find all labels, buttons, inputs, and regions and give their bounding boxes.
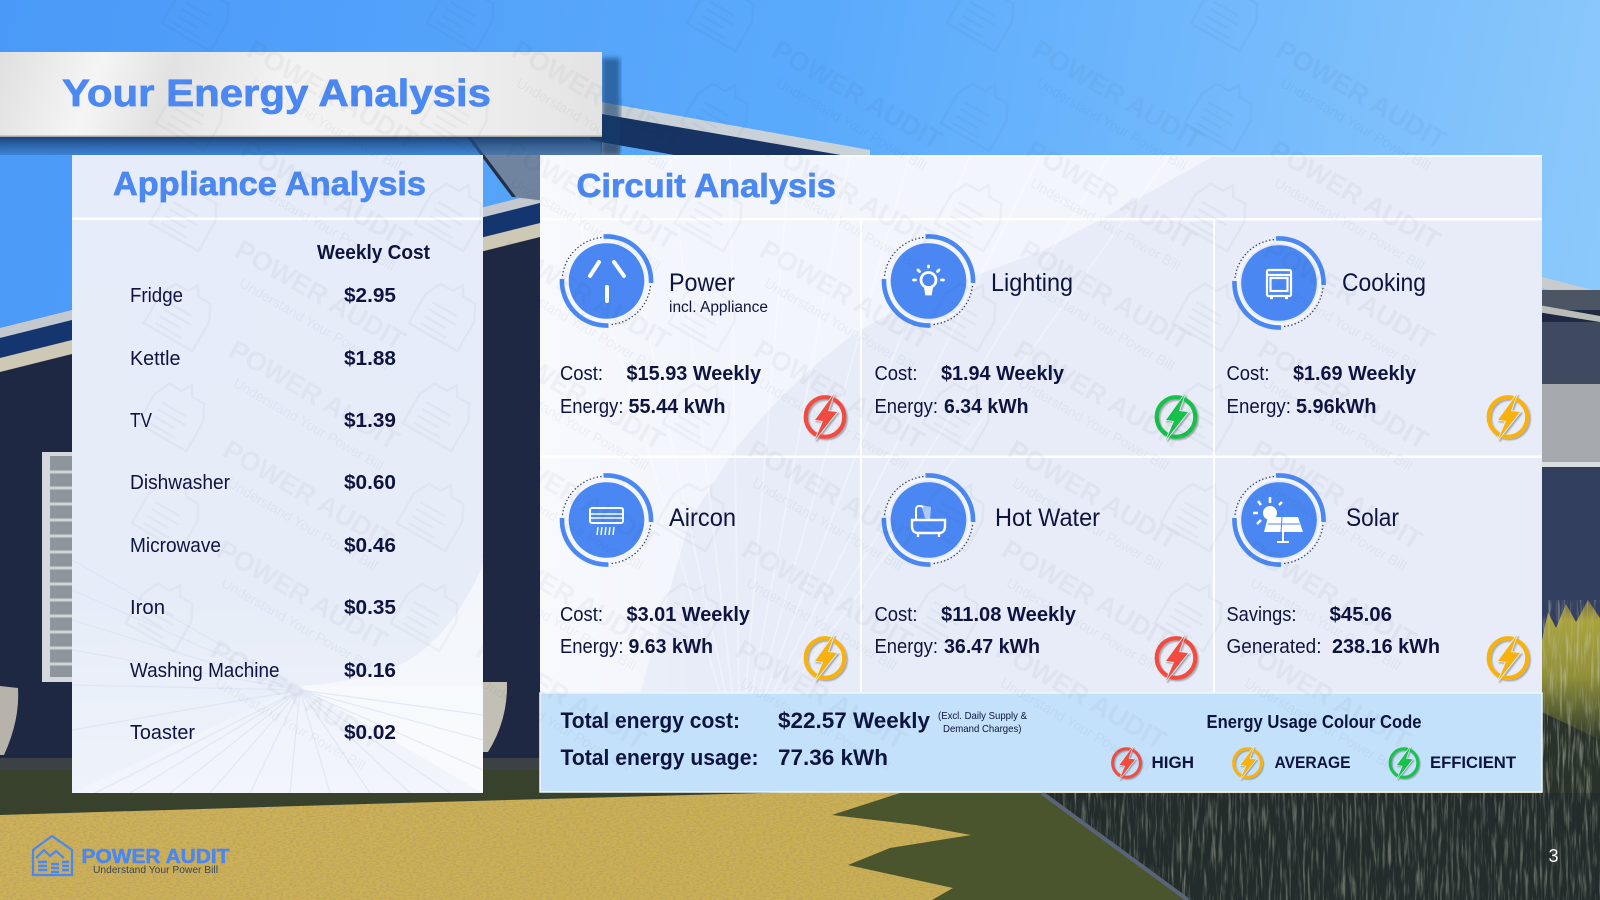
card: solar: Savings:: [1226, 604, 1296, 626]
watermark pattern: POWER AUDIT: [1241, 534, 1422, 656]
appliance list: $0.60: [344, 472, 396, 494]
legend: energy usage colour code: Energy Usage Colour Code: [1206, 712, 1422, 732]
watermark pattern: POWER AUDIT: [242, 34, 423, 156]
watermark pattern: [119, 0, 1463, 774]
watermark pattern: Understand Your Power Bill: [502, 275, 657, 374]
icon: sun and solar panel: [1234, 475, 1324, 565]
card: cooking: Cost:: [1226, 363, 1270, 385]
watermark pattern: Understand Your Power Bill: [756, 375, 911, 474]
card: cooking: Cooking: [1342, 269, 1426, 297]
watermark pattern: POWER AUDIT: [483, 434, 664, 556]
watermark pattern: POWER AUDIT: [1247, 434, 1428, 556]
card: hot water: Hot Water: [995, 504, 1100, 532]
watermark pattern: Understand Your Power Bill: [1010, 475, 1165, 574]
watermark pattern: POWER AUDIT: [224, 334, 405, 456]
watermark pattern: Understand Your Power Bill: [1278, 75, 1433, 174]
watermark pattern: Understand Your Power Bill: [762, 275, 917, 374]
appliance list: Iron: [130, 597, 165, 619]
icon: red high bolt: [1157, 635, 1195, 681]
watermark pattern: Understand Your Power Bill: [496, 375, 651, 474]
card: power: [560, 236, 844, 440]
watermark pattern: POWER AUDIT: [1253, 334, 1434, 456]
heading: Appliance Analysis: [113, 165, 426, 202]
card: solar: Solar: [1346, 504, 1399, 532]
watermark pattern: Understand Your Power Bill: [231, 375, 386, 474]
decorative fan and swoosh: [72, 560, 483, 793]
card: aircon: $3.01 Weekly: [626, 604, 751, 626]
card: power: Energy:: [560, 396, 624, 418]
icon: house with bars: [33, 836, 72, 875]
icon: bathtub with shower: [884, 475, 973, 565]
legend: energy usage colour code: EFFICIENT: [1430, 753, 1517, 772]
card: aircon: Cost:: [560, 604, 603, 626]
watermark pattern: POWER AUDIT: [1259, 234, 1440, 356]
icon: red high bolt: [806, 394, 844, 440]
watermark pattern: POWER AUDIT: [218, 434, 399, 556]
watermark pattern: Understand Your Power Bill: [219, 575, 374, 674]
right roof and wall: [1500, 266, 1600, 637]
appliance list: $1.39: [344, 410, 396, 432]
watermark pattern: POWER AUDIT: [761, 134, 942, 256]
card: hot water: $11.08 Weekly: [941, 604, 1077, 626]
card: lighting: Energy:: [874, 396, 938, 418]
card: cooking: $1.69 Weekly: [1293, 363, 1417, 385]
appliance list: Washing Machine: [130, 660, 280, 682]
watermark pattern: Understand Your Power Bill: [1034, 75, 1189, 174]
card: cooking: Energy:: [1226, 396, 1291, 418]
house wall: [0, 170, 1600, 800]
card: solar: [1226, 475, 1527, 681]
watermark pattern: POWER AUDIT: [1009, 334, 1190, 456]
watermark pattern: Understand Your Power Bill: [1242, 675, 1397, 774]
card: solar: $45.06: [1330, 604, 1392, 626]
legend: energy usage colour code: HIGH: [1152, 753, 1194, 772]
footer: totals and legend: [540, 693, 1542, 792]
watermark pattern: Understand Your Power Bill: [1254, 475, 1409, 574]
watermark pattern: Understand Your Power Bill: [1028, 175, 1183, 274]
logo: power audit: POWER AUDIT: [82, 846, 230, 868]
totals: Demand Charges): [943, 723, 1022, 735]
legend: energy usage colour code: [1113, 712, 1517, 780]
centre gable roof and soffit: [467, 100, 870, 210]
watermark pattern: POWER AUDIT: [749, 334, 930, 456]
icon: amber average bolt: [1489, 635, 1527, 681]
card: cooking: [1226, 238, 1527, 440]
icon: amber average bolt: [1489, 394, 1527, 440]
watermark pattern: Understand Your Power Bill: [1266, 275, 1421, 374]
appliance list: $0.46: [344, 535, 396, 557]
watermark pattern: POWER AUDIT: [471, 634, 652, 756]
appliance list: $1.88: [344, 348, 396, 370]
appliance list: Kettle: [130, 348, 180, 370]
card: aircon: 9.63 kWh: [628, 636, 713, 658]
watermark pattern: Understand Your Power Bill: [1272, 175, 1427, 274]
watermark pattern: POWER AUDIT: [1003, 434, 1184, 556]
totals: $22.57 Weekly: [778, 708, 931, 733]
decorative swoosh and rays: [540, 157, 1211, 692]
watermark pattern: POWER AUDIT: [1265, 134, 1446, 256]
watermark pattern: POWER AUDIT: [755, 234, 936, 356]
card: aircon: Aircon: [669, 504, 736, 532]
watermark pattern: POWER AUDIT: [230, 234, 411, 356]
watermark pattern: Understand Your Power Bill: [243, 175, 398, 274]
totals: 77.36 kWh: [778, 745, 888, 770]
watermark pattern: Understand Your Power Bill: [249, 75, 404, 174]
column header: Weekly Cost: [317, 242, 430, 264]
icon: green efficient bolt: [1157, 394, 1195, 440]
card: hot water: Cost:: [874, 604, 918, 626]
watermark pattern: POWER AUDIT: [489, 334, 670, 456]
watermark pattern: POWER AUDIT: [236, 134, 417, 256]
appliance list: [130, 285, 396, 744]
watermark pattern: POWER AUDIT: [212, 534, 393, 656]
watermark pattern: POWER AUDIT: [1021, 134, 1202, 256]
watermark pattern: Understand Your Power Bill: [478, 675, 633, 774]
watermark pattern: POWER AUDIT: [737, 534, 918, 656]
heading: Circuit Analysis: [576, 167, 836, 204]
totals: [560, 708, 1027, 770]
appliance list: $0.02: [344, 722, 396, 744]
card: solar: 238.16 kWh: [1332, 636, 1440, 658]
watermark pattern: POWER AUDIT: [767, 34, 948, 156]
logo: power audit: [33, 836, 230, 876]
watermark pattern: Understand Your Power Bill: [768, 175, 923, 274]
watermark pattern: Understand Your Power Bill: [738, 675, 893, 774]
appliance list: Fridge: [130, 285, 183, 307]
watermark pattern: Understand Your Power Bill: [490, 475, 645, 574]
panel: appliance analysis: [72, 155, 483, 793]
title band shadow: [0, 58, 620, 155]
panel: circuit analysis: [540, 155, 1542, 792]
watermark pattern: POWER AUDIT: [501, 134, 682, 256]
card: lighting: [874, 236, 1195, 440]
watermark pattern: Understand Your Power Bill: [213, 675, 368, 774]
watermark pattern: POWER AUDIT: [507, 34, 688, 156]
icon: oven: [1234, 238, 1324, 328]
watermark pattern: POWER AUDIT: [1235, 634, 1416, 756]
watermark pattern: Understand Your Power Bill: [225, 475, 380, 574]
watermark pattern: POWER AUDIT: [477, 534, 658, 656]
page number: 3: [1548, 846, 1559, 866]
totals: Total energy cost:: [560, 708, 740, 733]
card: power: 55.44 kWh: [628, 396, 726, 418]
card: power: Power: [669, 269, 735, 297]
watermark pattern: POWER AUDIT: [495, 234, 676, 356]
watermark pattern: Understand Your Power Bill: [774, 75, 929, 174]
watermark pattern: POWER AUDIT: [206, 634, 387, 756]
card: aircon: [560, 475, 844, 681]
appliance list: $0.16: [344, 660, 396, 682]
title: Your Energy Analysis: [62, 73, 491, 115]
logo: power audit: Understand Your Power Bill: [93, 864, 218, 876]
watermark pattern: Understand Your Power Bill: [237, 275, 392, 374]
totals: (Excl. Daily Supply &: [938, 710, 1027, 722]
card: solar: Generated:: [1226, 636, 1322, 658]
watermark pattern: POWER AUDIT: [1015, 234, 1196, 356]
planter pots: [0, 682, 507, 755]
icon: amber average bolt: [806, 635, 844, 681]
card: hot water: Energy:: [874, 636, 938, 658]
card: hot water: 36.47 kWh: [944, 636, 1040, 658]
card: lighting: $1.94 Weekly: [941, 363, 1065, 385]
watermark pattern: Understand Your Power Bill: [750, 475, 905, 574]
card: power: $15.93 Weekly: [626, 363, 762, 385]
icon: air conditioner: [562, 475, 651, 565]
card: power: incl. Appliance: [669, 299, 768, 316]
icon: light bulb: [884, 236, 973, 326]
watermark pattern: Understand Your Power Bill: [508, 175, 663, 274]
watermark pattern: Understand Your Power Bill: [484, 575, 639, 674]
icon: power socket: [562, 236, 651, 326]
window with louvres: [42, 452, 82, 682]
appliance list: Dishwasher: [130, 472, 230, 494]
card: lighting: 6.34 kWh: [944, 396, 1028, 418]
card: lighting: Cost:: [874, 363, 918, 385]
card: aircon: Energy:: [560, 636, 624, 658]
card: power: Cost:: [560, 363, 603, 385]
appliance list: Toaster: [130, 722, 195, 744]
watermark pattern: POWER AUDIT: [997, 534, 1178, 656]
card: cooking: 5.96kWh: [1296, 396, 1376, 418]
left roof fascia: [0, 188, 560, 372]
appliance list: TV: [130, 410, 153, 432]
card: lighting: Lighting: [991, 269, 1073, 297]
appliance list: $0.35: [344, 597, 396, 619]
watermark pattern: POWER AUDIT: [991, 634, 1172, 756]
watermark pattern: POWER AUDIT: [743, 434, 924, 556]
watermark pattern: POWER AUDIT: [731, 634, 912, 756]
totals: Total energy usage:: [560, 745, 758, 770]
watermark pattern: Understand Your Power Bill: [998, 675, 1153, 774]
card: hot water: [874, 475, 1195, 681]
watermark pattern: Understand Your Power Bill: [1260, 375, 1415, 474]
legend: energy usage colour code: AVERAGE: [1274, 753, 1350, 772]
appliance list: Microwave: [130, 535, 221, 557]
watermark pattern: Understand Your Power Bill: [514, 75, 669, 174]
watermark pattern: Understand Your Power Bill: [1022, 275, 1177, 374]
watermark pattern: Understand Your Power Bill: [1004, 575, 1159, 674]
title band: [0, 52, 602, 137]
watermark pattern: POWER AUDIT: [1271, 34, 1452, 156]
watermark pattern: Understand Your Power Bill: [1016, 375, 1171, 474]
watermark pattern: Understand Your Power Bill: [744, 575, 899, 674]
watermark pattern: POWER AUDIT: [1027, 34, 1208, 156]
appliance list: $2.95: [344, 285, 396, 307]
watermark pattern: Understand Your Power Bill: [1248, 575, 1403, 674]
lawn: [0, 600, 1600, 900]
